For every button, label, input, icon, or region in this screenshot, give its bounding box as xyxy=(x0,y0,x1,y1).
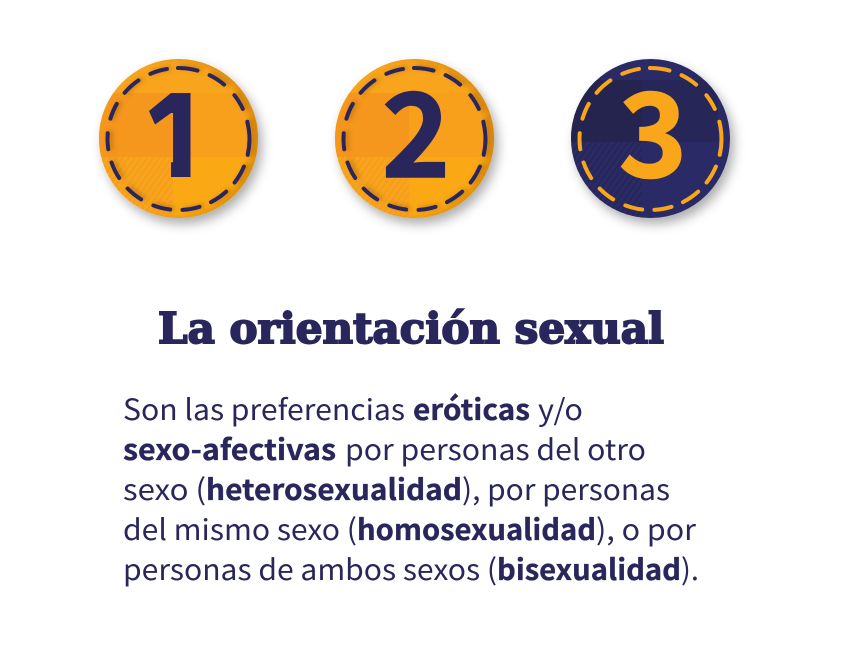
coin 1 xyxy=(99,43,258,218)
body text: personas de ambos sexos ( xyxy=(123,547,497,589)
number 3: 3 xyxy=(619,43,687,211)
body text: del mismo sexo ( xyxy=(123,507,357,549)
body text: sexo ( xyxy=(123,467,206,509)
title: La orientación sexual xyxy=(158,304,664,353)
body text: bisexualidad xyxy=(497,547,681,589)
body text: Son las preferencias xyxy=(123,387,405,429)
stitched ring 1 xyxy=(108,68,250,210)
body text: ), por personas xyxy=(462,467,670,509)
body text: ), o por xyxy=(596,507,697,549)
body text: y/o xyxy=(538,387,583,429)
body text xyxy=(123,387,699,589)
number 1 xyxy=(149,93,190,177)
number 1: 1 xyxy=(146,43,214,211)
number 2: 2 xyxy=(382,43,450,211)
body text: sexo-afectivas xyxy=(123,427,336,469)
body text: heterosexualidad xyxy=(206,467,462,509)
coin 2 xyxy=(335,43,494,218)
stitched ring 2 xyxy=(344,68,486,210)
body text: eróticas xyxy=(413,387,530,429)
body text: ). xyxy=(681,547,699,589)
body text: homosexualidad xyxy=(357,507,596,549)
coin 3 xyxy=(571,43,730,218)
stitched ring 3 xyxy=(580,68,722,210)
body text: por personas del otro xyxy=(345,427,646,469)
